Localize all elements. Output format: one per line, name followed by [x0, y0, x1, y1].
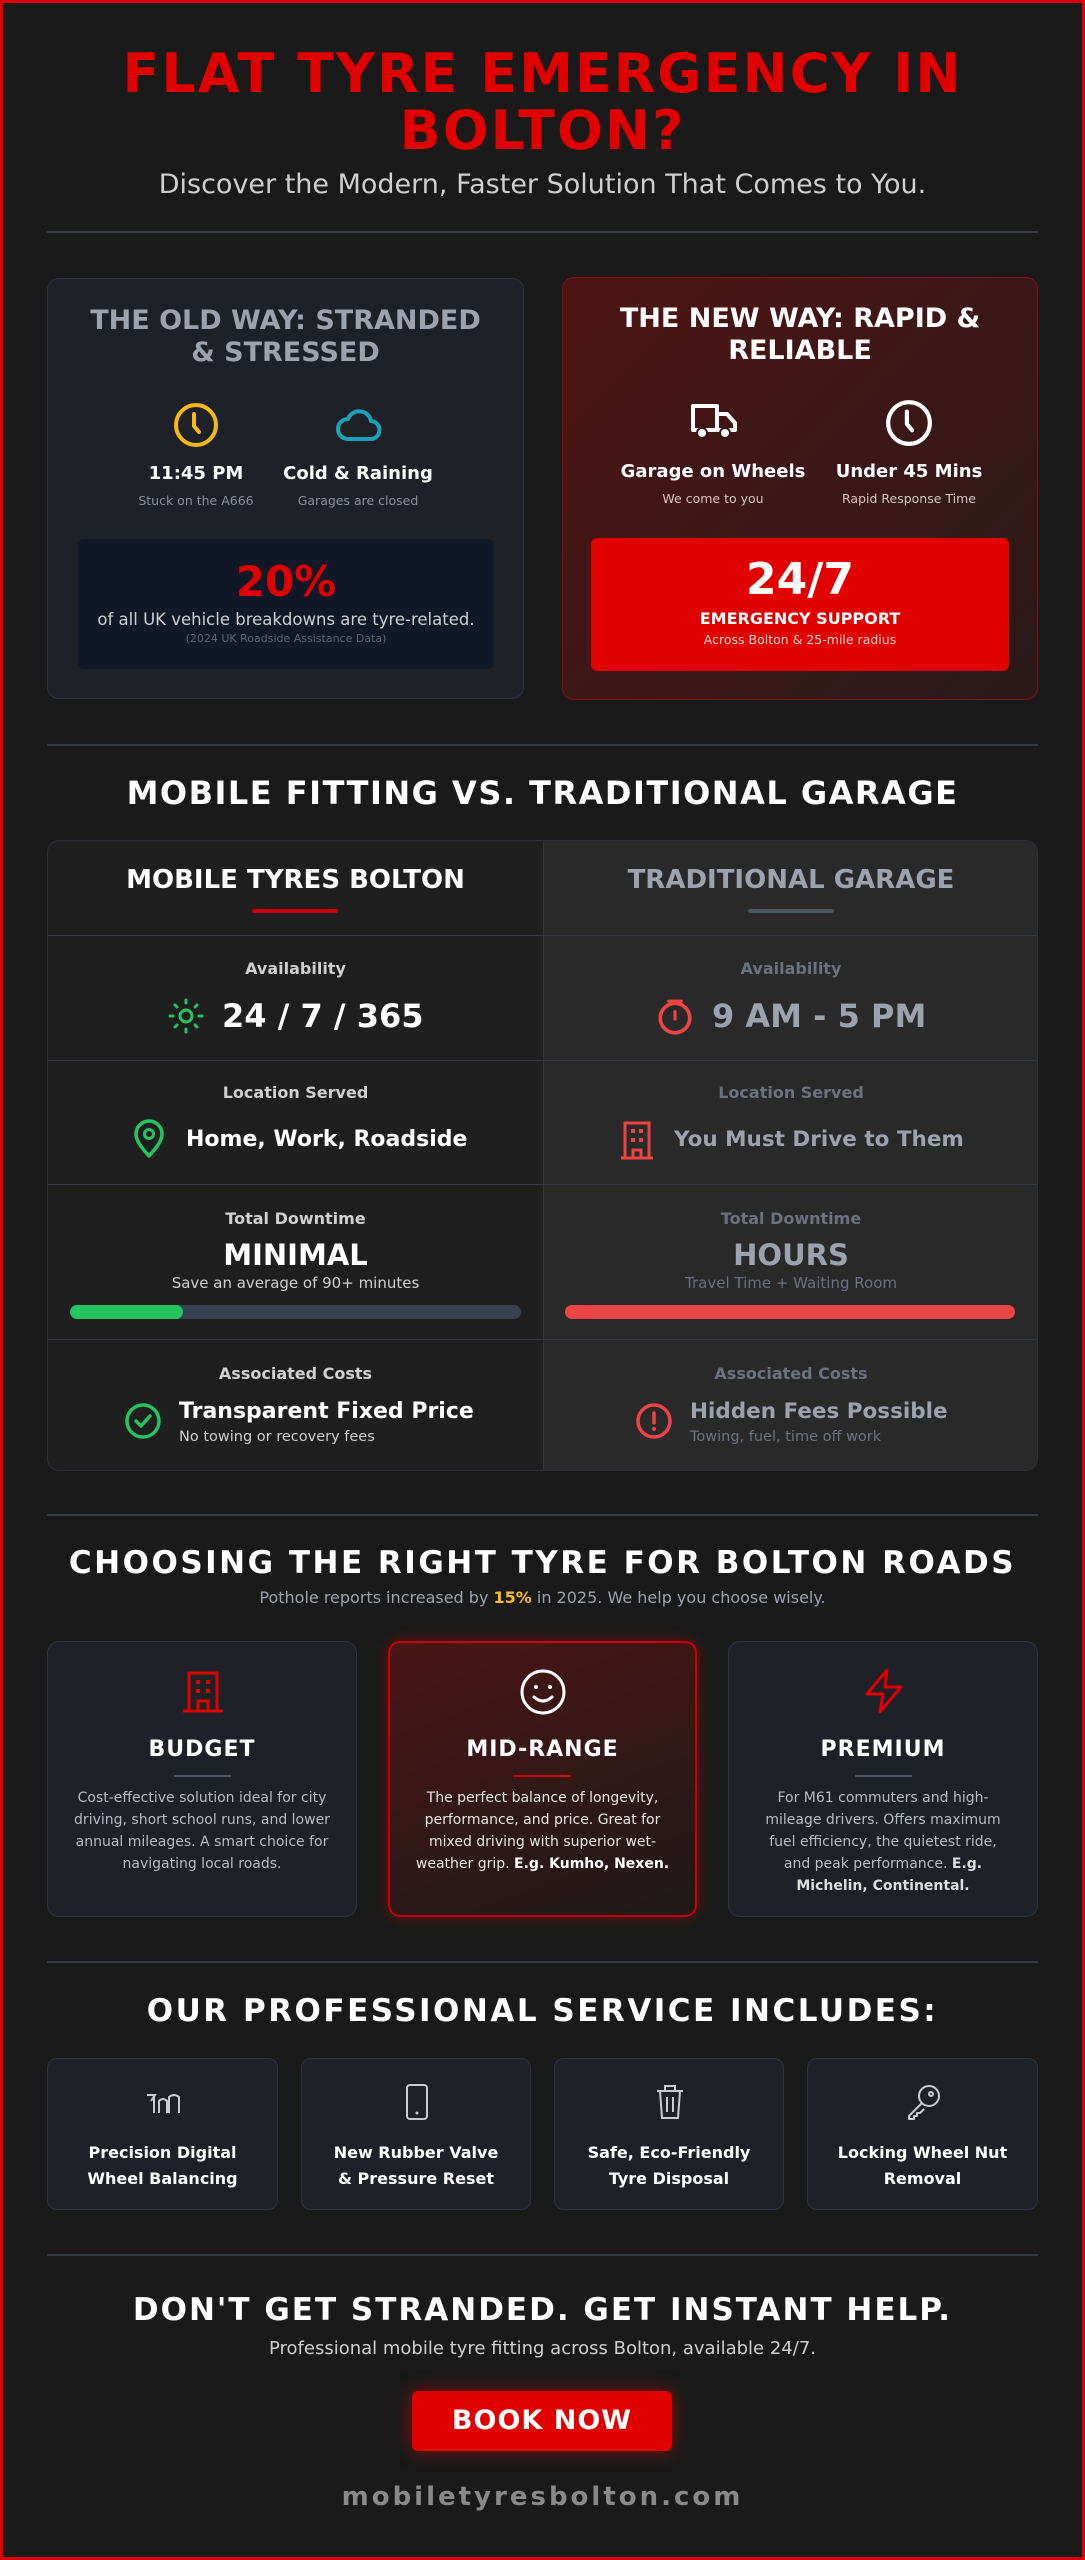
- title: BOLTON?: [400, 99, 685, 162]
- heading: services: OUR PROFESSIONAL SERVICE INCLUDES:: [147, 1993, 938, 2029]
- row: location mobile: Location Served: [223, 1083, 368, 1102]
- icon: building red: [183, 1672, 223, 1712]
- card: mid-range: MID-RANGE: [466, 1737, 619, 1762]
- row: location garage: [621, 1083, 964, 1160]
- bar: mobile downtime: [70, 1305, 521, 1319]
- service: locking nut: Locking Wheel Nut: [838, 2143, 1007, 2162]
- card: mid-range: The perfect balance of longevity, performance, and price. Great for mixed driving with superior wet-weather grip. E.g. Kumho, Nexen.: [416, 1790, 669, 1872]
- column header: mobile: MOBILE TYRES BOLTON: [126, 865, 465, 895]
- button: book now: [412, 2391, 672, 2451]
- row: location mobile: [134, 1083, 467, 1158]
- panel: old way: Stuck on the A666: [138, 493, 254, 508]
- icon: smiley: [520, 1670, 566, 1714]
- service: valve: & Pressure Reset: [338, 2169, 494, 2188]
- row: availability mobile: Availability: [245, 959, 346, 978]
- stat: weather: Cold & Raining: [283, 463, 433, 484]
- heading: call to action: DON'T GET STRANDED. GET INSTANT HELP.: [133, 2292, 952, 2328]
- icon: phone: [406, 2084, 428, 2120]
- column header: garage: TRADITIONAL GARAGE: [628, 865, 954, 895]
- icon: trash: [657, 2085, 683, 2119]
- service: balancing: Precision Digital: [88, 2143, 237, 2162]
- icon: clock yellow: [174, 403, 218, 447]
- row: costs mobile: No towing or recovery fees: [179, 1429, 375, 1445]
- icon: sun: [168, 998, 204, 1034]
- stat box: 20%: 20%: [236, 557, 336, 606]
- icon: map pin: [134, 1119, 164, 1158]
- service: disposal: Tyre Disposal: [609, 2169, 729, 2188]
- heading: choosing tyre: CHOOSING THE RIGHT TYRE FOR BOLTON ROADS: [69, 1545, 1016, 1581]
- row: downtime garage: HOURS: [733, 1238, 849, 1272]
- bar: garage downtime: [565, 1305, 1015, 1319]
- icon: building: [621, 1122, 653, 1160]
- panel: new way: Rapid Response Time: [842, 491, 976, 506]
- title: FLAT TYRE EMERGENCY IN: [122, 42, 963, 105]
- row: downtime mobile: MINIMAL: [223, 1238, 368, 1272]
- row: costs garage: Hidden Fees Possible: [690, 1399, 948, 1424]
- service: valve: New Rubber Valve: [334, 2143, 498, 2162]
- stat: under 45 mins: Under 45 Mins: [836, 461, 982, 482]
- stat box: 20%: [78, 539, 494, 669]
- panel: old way: Garages are closed: [298, 493, 418, 508]
- panel: new way: [562, 277, 1038, 700]
- panel: old way: [47, 278, 524, 699]
- row: costs mobile: [125, 1364, 474, 1445]
- panel: new way: We come to you: [662, 491, 764, 506]
- row: costs garage: [636, 1364, 948, 1445]
- row: downtime mobile: Save an average of 90+ minutes: [172, 1274, 419, 1292]
- button: book now: BOOK NOW: [452, 2405, 632, 2436]
- row: availability garage: 9 AM - 5 PM: [712, 997, 926, 1035]
- stat box: 20%: of all UK vehicle breakdowns are tyre-related.: [97, 610, 475, 629]
- card: premium: For M61 commuters and high-mileage drivers. Offers maximum fuel efficiency, the quietest ride, and peak performance. E.g. Michelin, Continental.: [765, 1790, 1001, 1894]
- subtitle: Discover the Modern, Faster Solution That Comes to You.: [159, 169, 926, 200]
- heading: comparison: MOBILE FITTING VS. TRADITIONAL GARAGE: [127, 774, 958, 812]
- column header: mobile: [126, 865, 465, 913]
- icon: truck: [691, 404, 737, 439]
- heading: new way: RELIABLE: [728, 335, 872, 366]
- icon: lightning: [865, 1668, 903, 1714]
- heading: old way: THE OLD WAY: STRANDED: [90, 305, 481, 336]
- stat box: 20%: (2024 UK Roadside Assistance Data): [186, 632, 386, 645]
- title: [122, 42, 963, 162]
- heading: old way: & STRESSED: [191, 337, 380, 368]
- card: premium: PREMIUM: [821, 1737, 945, 1762]
- row: location garage: Location Served: [718, 1083, 864, 1102]
- text: cta subtitle: Professional mobile tyre fitting across Bolton, available 24/7.: [269, 2338, 816, 2359]
- stat: garage on wheels: Garage on Wheels: [621, 461, 805, 482]
- card: budget: BUDGET: [148, 1737, 256, 1762]
- heading: new way: THE NEW WAY: RAPID &: [620, 303, 980, 334]
- row: downtime garage: [565, 1209, 1015, 1319]
- row: availability garage: [658, 959, 926, 1035]
- callout: 24/7: 24/7: [746, 554, 854, 605]
- card: mid-range: [388, 1641, 697, 1917]
- row: downtime mobile: [70, 1209, 521, 1319]
- card: premium: [728, 1641, 1038, 1917]
- card: budget: Cost-effective solution ideal for city driving, short school runs, and lower annual mileages. A smart choice for navigating local roads.: [74, 1790, 330, 1872]
- column header: garage: [628, 865, 954, 913]
- icon: cloud: [336, 409, 382, 441]
- service: locking nut: [807, 2058, 1038, 2210]
- heading: old way: [90, 305, 481, 368]
- row: costs garage: Associated Costs: [714, 1364, 868, 1383]
- service: disposal: [554, 2058, 784, 2210]
- row: downtime garage: Travel Time + Waiting Room: [685, 1274, 897, 1292]
- callout: 24/7: [591, 538, 1009, 671]
- row: costs garage: Towing, fuel, time off work: [690, 1429, 881, 1445]
- service: valve: [301, 2058, 531, 2210]
- icon: key: [908, 2085, 940, 2120]
- row: costs mobile: Transparent Fixed Price: [179, 1399, 474, 1424]
- service: balancing: [47, 2058, 278, 2210]
- row: downtime mobile: Total Downtime: [225, 1209, 366, 1228]
- service: balancing: Wheel Balancing: [87, 2169, 238, 2188]
- heading: new way: [620, 303, 980, 366]
- row: costs mobile: Associated Costs: [219, 1364, 372, 1383]
- row: downtime garage: Total Downtime: [721, 1209, 861, 1228]
- callout: 24/7: EMERGENCY SUPPORT: [700, 609, 900, 628]
- row: location garage: You Must Drive to Them: [674, 1127, 964, 1152]
- icon: clock white: [886, 400, 932, 446]
- callout: 24/7: Across Bolton & 25-mile radius: [704, 632, 896, 647]
- text: website url: mobiletyresbolton.com: [342, 2482, 743, 2512]
- comparison table: [47, 840, 1038, 1471]
- stat: time: 11:45 PM: [149, 463, 243, 484]
- service: locking nut: Removal: [884, 2169, 961, 2188]
- icon: balance: [147, 2094, 180, 2113]
- row: location mobile: Home, Work, Roadside: [186, 1127, 467, 1152]
- card: budget: [47, 1641, 357, 1917]
- row: availability garage: Availability: [741, 959, 841, 978]
- service: disposal: Safe, Eco-Friendly: [588, 2143, 750, 2162]
- row: availability mobile: [168, 959, 424, 1035]
- icon: check circle: [125, 1403, 161, 1439]
- row: availability mobile: 24 / 7 / 365: [222, 997, 424, 1035]
- icon: clock red: [658, 1000, 692, 1035]
- icon: alert circle: [636, 1403, 672, 1439]
- subheading: pothole stat: Pothole reports increased by 15% in 2025. We help you choose wisely.: [259, 1588, 826, 1607]
